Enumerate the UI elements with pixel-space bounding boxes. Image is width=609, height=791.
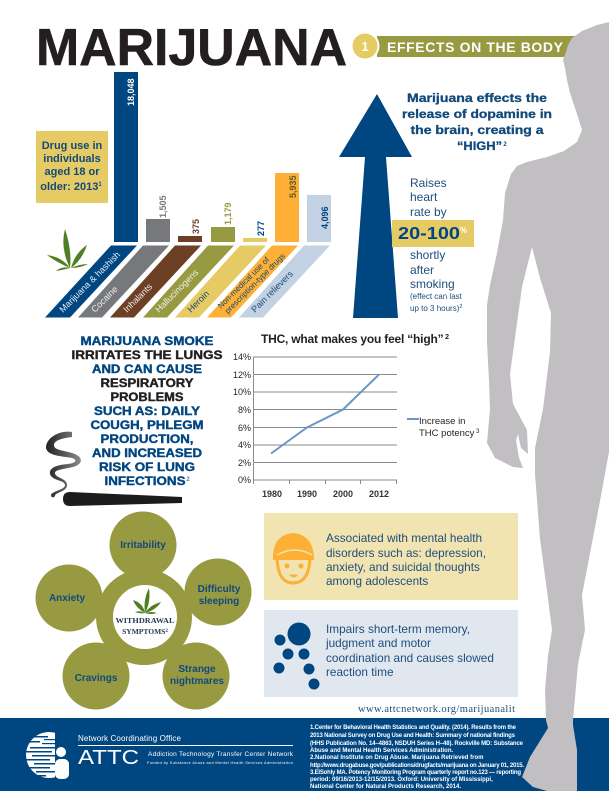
category labels: Marijuana & hashish: [57, 250, 122, 314]
bar: cocaine: [146, 219, 170, 242]
text: lungs: 2: [186, 477, 190, 483]
category labels: Pain relievers: [249, 268, 295, 314]
symptom labels: sleeping: [199, 596, 239, 607]
symptom labels: Irritability: [120, 540, 166, 551]
icon: ATTC globe and people: [26, 732, 72, 779]
symptom labels: [49, 540, 241, 687]
category labels: Non-medical use of: [216, 255, 272, 310]
x axis labels: 2012: [369, 489, 389, 499]
y axis labels: 6%: [238, 423, 251, 433]
text: lungs: RESPIRATORY: [100, 378, 194, 390]
symptom labels: Difficulty: [198, 584, 241, 595]
diagram: withdrawal symptoms: [36, 512, 252, 710]
panel: mental health: among adolescents: [326, 574, 428, 588]
text: dopamine: Marijuana effects the: [407, 91, 547, 105]
icon: smoke and joint: [46, 432, 182, 506]
text: lungs: IRRITATES THE LUNGS: [72, 350, 223, 362]
bar: inhalants: [178, 236, 202, 242]
text: heart rate: after: [410, 263, 434, 277]
chart title: THC, what makes you feel “high”: [261, 332, 444, 346]
panel: mental health: Associated with mental health: [326, 531, 482, 545]
text: heart rate: rate by: [410, 205, 447, 219]
text: lungs: RISK OF LUNG: [99, 462, 195, 474]
callout: drug use label: individuals: [43, 153, 101, 165]
symptom labels: nightmares: [170, 676, 224, 687]
website url: www.attcnetwork.org/marijuanalit: [358, 704, 515, 715]
text: heart rate: up to 3 hours): [410, 304, 459, 313]
section banner: effects on the body: [350, 32, 579, 60]
category labels: Hallucinogens: [153, 267, 201, 314]
bar values: 375: [191, 219, 201, 234]
legend: Increase in: [419, 416, 465, 427]
y axis labels: 8%: [238, 405, 251, 415]
bar values: 4,096: [320, 206, 330, 229]
callout: drug use label: aged 18 or: [44, 166, 100, 178]
legend: 3: [474, 429, 480, 435]
text: heart rate: shortly: [410, 248, 445, 262]
chart title: 2: [443, 334, 449, 341]
center label: [116, 616, 174, 636]
text: heart rate: 2: [459, 304, 462, 310]
text: lungs: PRODUCTION,: [100, 434, 194, 446]
icon: dots: [274, 622, 320, 690]
bar: heroin: [243, 238, 267, 242]
section banner: effects on the body: 1: [361, 39, 369, 54]
y axis labels: 12%: [233, 370, 251, 380]
bar values: [126, 78, 330, 236]
callout: drug use label: 1: [98, 182, 102, 188]
callout: drug use label: older: 2013: [40, 181, 98, 193]
x axis labels: [262, 489, 389, 499]
panel: memory: [264, 610, 518, 697]
text: heart rate: Raises: [410, 176, 447, 190]
text: dopamine: release of dopamine in: [402, 107, 552, 121]
footer office name: Network Coordinating Office: [78, 734, 182, 743]
y axis labels: 10%: [233, 387, 251, 397]
text: lungs: MARIJUANA SMOKE: [80, 336, 214, 348]
footer logo: ATTC: [26, 732, 294, 779]
bar values: 5,935: [288, 175, 298, 198]
footer references: 2013 National Survey on Drug Use and Health: Summary of national findings: [310, 733, 516, 739]
callout: 20-100 percent: [392, 220, 474, 247]
category labels: Cocaine: [89, 284, 120, 314]
center label: WITHDRAWAL: [116, 616, 174, 625]
text: dopamine: the brain, creating a: [410, 123, 544, 137]
bar: marijuana and hashish: [114, 72, 138, 242]
bar: hallucinogens: [211, 227, 235, 242]
category labels: Inhalants: [121, 281, 155, 314]
category bands: [45, 246, 330, 318]
text: lungs: PROBLEMS: [110, 392, 184, 404]
text: dopamine: [402, 91, 552, 153]
symptom labels: Anxiety: [49, 593, 85, 604]
y axis labels: 4%: [238, 440, 251, 450]
x axis labels: 1980: [262, 489, 282, 499]
center label: 2: [165, 629, 168, 634]
callout: 20-100 percent: %: [460, 226, 467, 235]
text: lungs: COUGH, PHLEGM: [90, 420, 204, 432]
panel: mental health: [264, 513, 518, 600]
icon: small leaf: [133, 588, 161, 614]
footer band: [0, 718, 609, 791]
y axis labels: [233, 352, 251, 485]
x axis labels: 2000: [333, 489, 353, 499]
panel: memory: coordination and causes slowed: [326, 651, 494, 665]
text: heart rate: smoking: [410, 277, 455, 291]
footer references: 3.ElSohly MA. Potency Monitoring Program quarterly report no.123 — reporting: [310, 770, 521, 776]
category labels: Heroin: [185, 289, 211, 314]
text: heart rate: (effect can last: [410, 292, 463, 301]
bar values: 1,179: [223, 202, 233, 225]
bar values: 277: [256, 221, 266, 236]
footer references: period: 09/16/2013-12/15/2013. Oxford: University of Mississippi,: [310, 777, 493, 783]
bar values: 1,505: [158, 195, 168, 218]
text: heart rate: heart: [410, 190, 438, 204]
human silhouette: [487, 22, 609, 791]
category labels: [57, 250, 295, 315]
legend: [407, 416, 480, 439]
section banner: effects on the body: EFFECTS ON THE BODY: [387, 39, 564, 55]
panel: mental health: disorders such as: depression,: [326, 546, 486, 560]
icon: up arrow: [339, 94, 412, 318]
panel: memory: reaction time: [326, 665, 394, 679]
callout: drug use label: Drug use in: [42, 140, 103, 152]
bar chart: drug use: [45, 72, 331, 318]
panel: memory: judgment and motor: [325, 636, 431, 650]
y axis labels: 14%: [233, 352, 251, 362]
panel: mental health: anxiety, and suicidal thoughts: [326, 560, 480, 574]
footer references: National Center for Natural Products Research, 2014.: [310, 784, 461, 790]
symptom labels: Strange: [178, 664, 216, 675]
footer logo: ATTC: Addiction Technology Transfer Center Network: [148, 751, 294, 758]
text: lungs: INFECTIONS: [104, 476, 186, 488]
bar: pain relievers: [307, 195, 331, 242]
footer logo: ATTC: ATTC: [78, 747, 139, 769]
bar: non-medical prescription: [275, 173, 299, 242]
y axis labels: 0%: [238, 475, 251, 485]
symptom labels: Cravings: [75, 673, 118, 684]
category labels: prescription-type drugs: [223, 252, 287, 315]
callout: drug use label: [36, 131, 108, 203]
y axis labels: 2%: [238, 458, 251, 468]
center label: SYMPTOMS: [122, 627, 165, 636]
text: lungs: [72, 336, 223, 488]
text: lungs: AND CAN CAUSE: [92, 364, 202, 376]
footer references: [310, 725, 524, 790]
text: dopamine: “HIGH”: [457, 139, 502, 153]
footer references: http://www.drugabuse.gov/publications/drugfacts/marijuana on January 01, 2015.: [310, 763, 524, 769]
data line: [271, 374, 379, 454]
footer references: 2.National Institute on Drug Abuse. Marijuana Retrieved from: [310, 755, 483, 761]
title: MARIJUANA: [36, 19, 347, 77]
callout: 20-100 percent: 20-100: [398, 223, 460, 243]
icon: cannabis leaf: [47, 229, 88, 271]
footer references: Abuse and Mental Health Services Administration.: [310, 748, 453, 754]
bar values: 18,048: [126, 78, 136, 106]
panel: memory: Impairs short-term memory,: [326, 622, 470, 636]
chart: THC potency: [233, 332, 480, 499]
text: lungs: AND INCREASED: [92, 448, 202, 460]
text: dopamine: 2: [503, 142, 507, 148]
footer references: 1.Center for Behavioral Health Statistics and Quality. (2014). Results from the: [310, 725, 517, 731]
icon: face with cap: [273, 533, 314, 583]
x axis labels: 1990: [297, 489, 317, 499]
footer references: (HHS Publication No. 14–4863, NSDUH Series H–48). Rockville MD: Substance: [310, 741, 524, 747]
footer logo: ATTC: Funded by Substance Abuse and Mental Health Services Administration: [147, 761, 293, 765]
text: lungs: SUCH AS: DAILY: [94, 406, 200, 418]
text: heart rate: [392, 176, 474, 313]
legend: THC potency: [419, 428, 474, 439]
